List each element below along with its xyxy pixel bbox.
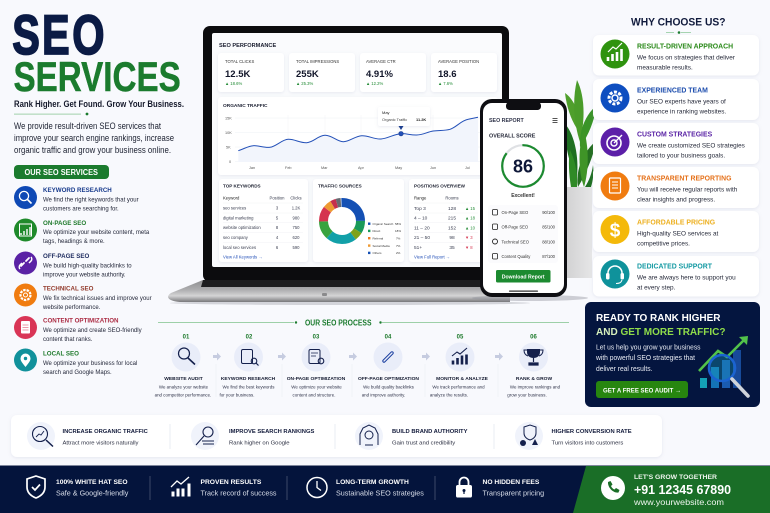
- reason: dedicated support: We are always here to support you: [637, 274, 736, 282]
- assurance: proven results: Track record of success: [200, 488, 277, 498]
- KPI: average CTR: ▲ 12.2%: [366, 81, 383, 86]
- step 1: website audit: [155, 334, 211, 398]
- reason: affordable pricing: High-quality SEO services at: [637, 230, 719, 238]
- service: technical SEO: [14, 284, 152, 311]
- service: content optimization: We optimize and create SEO-friendly: [43, 328, 142, 334]
- table: positions overview: 4 – 10: [414, 216, 428, 222]
- line chart: organic traffic: Jan: [249, 166, 255, 170]
- header block: [12, 4, 184, 155]
- step 5: monitor and analyze: MONITOR & ANALYZE: [436, 376, 489, 382]
- donut legend: 58%: [395, 222, 401, 226]
- CTA body: deliver real results.: [596, 364, 652, 373]
- KPI: total clicks: 12.5K: [225, 69, 250, 80]
- service: keyword research: customers are searching for.: [43, 206, 119, 212]
- why choose us heading: WHY CHOOSE US?: [631, 16, 726, 28]
- step 4: off-page optimization: 04: [385, 334, 392, 340]
- table: top keywords: local seo services: [223, 245, 256, 250]
- contact text: +91 12345 67890: [634, 483, 731, 497]
- laptop base shadow: [170, 301, 530, 305]
- service: off-page SEO: We build high-quality backlinks to: [43, 263, 132, 269]
- CTA headline: AND GET MORE TRAFFIC?: [596, 327, 726, 338]
- benefit: build brand authority: [355, 422, 468, 450]
- step 1: website audit: We analyze your website: [159, 385, 209, 390]
- intro paragraph: We provide result-driven SEO services that: [14, 121, 161, 131]
- KPI: total impressions: [289, 53, 355, 92]
- table: positions overview: 215: [448, 216, 456, 222]
- assurance: proven results: [171, 477, 277, 498]
- step 4: off-page optimization: [358, 334, 419, 398]
- step 3: on-page optimization: content and structure.: [293, 392, 335, 398]
- benefit: build brand authority: Gain trust and credibility: [392, 440, 455, 446]
- score breakdown: Technical SEO: [502, 239, 530, 244]
- donut legend: 18%: [395, 229, 401, 233]
- line chart: organic traffic: 0: [229, 160, 231, 164]
- panel: our SEO process: [155, 318, 569, 398]
- table: positions overview: 11 – 20: [414, 225, 430, 231]
- score breakdown: On-Page SEO: [502, 210, 529, 215]
- KPI: total clicks: [218, 53, 284, 92]
- service: technical SEO: website performance.: [42, 305, 101, 311]
- reason: dedicated support: at every step.: [637, 284, 676, 292]
- table: top keywords: Position: [270, 196, 285, 200]
- KPI: total clicks: TOTAL CLICKS: [225, 59, 254, 64]
- reason: custom strategies: [593, 123, 759, 164]
- assurance: long-term growth: [307, 478, 424, 498]
- services heading pill: OUR SEO SERVICES: [24, 168, 98, 177]
- intro paragraph: improve your search engine rankings, increase: [14, 133, 174, 143]
- donut legend: Organic Search: [372, 222, 394, 226]
- laptop screen: [212, 33, 502, 267]
- phone header: SEO REPORT: [489, 118, 524, 124]
- assurance: white hat SEO: [27, 476, 129, 498]
- score breakdown: [488, 205, 558, 263]
- step 6: rank and grow: grow your business.: [507, 392, 547, 398]
- table: positions overview: 51+: [414, 245, 422, 251]
- table: positions overview: ▼ 3: [465, 235, 473, 240]
- table: positions overview: 21 – 50: [414, 235, 430, 241]
- step 3: on-page optimization: [287, 334, 346, 398]
- CTA illustration: chart and magnifier: [699, 336, 748, 396]
- score breakdown: Content Quality: [502, 254, 531, 259]
- table: positions overview: ▲ 15: [465, 206, 476, 211]
- service: keyword research: We find the right keywords that your: [43, 197, 139, 203]
- score breakdown: 87/100: [542, 254, 556, 259]
- service: on-page SEO: tags, headings & more.: [43, 239, 105, 245]
- intro paragraph: organic traffic and grow your business online.: [14, 145, 171, 155]
- reason: affordable pricing: AFFORDABLE PRICING: [637, 220, 715, 226]
- service: content optimization: CONTENT OPTIMIZATION: [43, 318, 119, 324]
- table: top keywords: 4: [276, 235, 279, 240]
- chart tooltip: [378, 107, 430, 136]
- table: positions overview: Top 3: [414, 206, 426, 212]
- reason: affordable pricing: competitive prices.: [637, 240, 690, 248]
- score verdict: Excellent!: [511, 193, 535, 199]
- line chart: organic traffic: [218, 97, 498, 175]
- reason: experienced team: EXPERIENCED TEAM: [637, 88, 708, 94]
- step 4: off-page optimization: and improve authority.: [362, 392, 405, 398]
- step 6: rank and grow: 06: [530, 334, 537, 340]
- reason: experienced team: [593, 79, 759, 120]
- table: top keywords: 590: [292, 245, 300, 250]
- donut legend: 7%: [396, 244, 401, 248]
- CTA button: [596, 381, 688, 398]
- table: top keywords: 750: [292, 225, 300, 230]
- line chart: organic traffic: Jun: [430, 166, 436, 170]
- KPI: average position: 18.6: [438, 69, 456, 80]
- service: on-page SEO: [14, 218, 150, 245]
- CTA body: Let us help you grow your business: [596, 342, 701, 352]
- line chart: organic traffic: ORGANIC TRAFFIC: [223, 103, 268, 109]
- table: positions overview: ▼ 8: [465, 245, 473, 250]
- reason: transparent reporting: TRANSPARENT REPORTING: [637, 176, 731, 182]
- table: positions overview: 35: [449, 245, 455, 251]
- service: keyword research: [14, 186, 139, 212]
- line chart: organic traffic: Feb: [285, 166, 292, 170]
- service: off-page SEO: [14, 252, 132, 278]
- services heading pill: [14, 165, 109, 179]
- table: positions overview: ▲ 18: [465, 216, 476, 220]
- table: top keywords: Clicks: [290, 196, 302, 200]
- step 6: rank and grow: [507, 334, 561, 398]
- KPI: average CTR: 4.91%: [366, 69, 393, 80]
- contact text: [633, 474, 731, 507]
- plant: [563, 80, 597, 278]
- contact text: LET'S GROW TOGETHER: [634, 474, 717, 481]
- assurance: white hat SEO: 100% WHITE HAT SEO: [56, 479, 128, 486]
- service: technical SEO: We fix technical issues and improve your: [43, 296, 152, 302]
- reason: transparent reporting: clear insights and progress.: [637, 196, 715, 204]
- table: top keywords: 5: [276, 215, 279, 220]
- overall score label: OVERALL SCORE: [489, 134, 536, 140]
- reason: custom strategies: We create customized SEO strategies: [637, 142, 745, 150]
- panel: why choose us: [593, 16, 759, 296]
- KPI: average CTR: AVERAGE CTR: [366, 59, 396, 64]
- score breakdown: Off-Page SEO: [502, 225, 529, 230]
- step 2: keyword research: for your business.: [219, 392, 255, 398]
- step 1: website audit: and competitor performance.: [155, 392, 211, 398]
- phone body: [480, 99, 567, 297]
- table: top keywords: digital marketing: [223, 215, 254, 220]
- intro paragraph: [14, 121, 174, 155]
- KPI: average position: AVERAGE POSITION: [438, 59, 479, 64]
- KPI: average CTR: [360, 53, 426, 92]
- contact text: www.yourwebsite.com: [633, 498, 724, 507]
- KPI: average position: ▲ 7.6%: [438, 81, 453, 86]
- step 1: website audit: WEBSITE AUDIT: [164, 376, 203, 382]
- process heading: OUR SEO PROCESS: [305, 318, 372, 328]
- score breakdown: 88/100: [542, 239, 556, 244]
- step 5: monitor and analyze: 05: [457, 334, 464, 340]
- service: on-page SEO: We optimize your website content, meta: [43, 230, 150, 236]
- step 6: rank and grow: RANK & GROW: [516, 376, 552, 382]
- CTA headline: READY TO RANK HIGHER: [596, 313, 721, 324]
- table: top keywords: View All Keywords →: [223, 254, 262, 260]
- line chart: organic traffic: Apr: [358, 166, 365, 170]
- service: local SEO: LOCAL SEO: [43, 350, 79, 357]
- KPI: total impressions: 255K: [296, 69, 319, 80]
- reason: dedicated support: DEDICATED SUPPORT: [637, 264, 713, 270]
- service: local SEO: We optimize your business for local: [43, 361, 137, 367]
- service: off-page SEO: OFF-PAGE SEO: [43, 253, 89, 260]
- download button: Download Report: [502, 274, 545, 280]
- title: SERVICES: SERVICES: [14, 53, 181, 100]
- step 1: website audit: 01: [183, 334, 190, 340]
- donut legend: Referral: [372, 236, 384, 240]
- heading ornament: [666, 31, 691, 34]
- footer contact panel: [573, 466, 770, 513]
- donut legend: Direct: [372, 229, 381, 233]
- plant leaves: [565, 80, 597, 187]
- panel: our SEO services: [14, 165, 152, 376]
- assurance: white hat SEO: Safe & Google-friendly: [56, 488, 129, 498]
- table: positions overview: Range: [414, 196, 427, 200]
- line chart: organic traffic: Mar: [321, 166, 328, 170]
- tagline: Rank Higher. Get Found. Grow Your Business.: [14, 99, 184, 110]
- table: top keywords: TOP KEYWORDS: [223, 184, 261, 188]
- donut legend: [368, 222, 401, 255]
- donut chart: traffic sources: [313, 179, 404, 262]
- table: positions overview: View Full Report →: [414, 254, 450, 260]
- KPI: average position: [431, 53, 497, 92]
- table: top keywords: Keyword: [223, 196, 240, 200]
- dashboard title: SEO PERFORMANCE: [219, 43, 276, 49]
- icon: phone: [601, 476, 625, 500]
- step 4: off-page optimization: We build quality backlinks: [363, 385, 415, 390]
- table: positions overview: 152: [448, 225, 456, 231]
- table: top keywords: website optimization: [223, 225, 261, 230]
- line chart: organic traffic: 10K: [225, 131, 232, 135]
- CTA body: [595, 342, 701, 373]
- process arrows: [213, 352, 503, 360]
- assurance: long-term growth: LONG-TERM GROWTH: [336, 479, 409, 486]
- reason: experienced team: experience in ranking websites.: [637, 108, 726, 116]
- line chart: organic traffic: 5K: [226, 146, 231, 150]
- benefit: higher conversion rate: HIGHER CONVERSION RATE: [552, 429, 632, 435]
- title: SEO: SEO: [12, 4, 105, 67]
- panel: call to action: [585, 302, 760, 407]
- reason: experienced team: Our SEO experts have years of: [637, 98, 726, 106]
- KPI: total clicks: ▲ 18.6%: [225, 81, 242, 86]
- benefit: increase organic traffic: INCREASE ORGANIC TRAFFIC: [62, 429, 149, 435]
- table: top keywords: 8: [276, 225, 279, 230]
- line chart: organic traffic: 15K: [225, 116, 232, 120]
- table: top keywords: 980: [292, 215, 300, 220]
- service: technical SEO: TECHNICAL SEO: [43, 286, 94, 293]
- benefit: higher conversion rate: [515, 422, 632, 450]
- benefit: increase organic traffic: [27, 422, 149, 450]
- line chart: organic traffic: May: [395, 166, 402, 170]
- benefit: improve search rankings: [191, 422, 314, 450]
- table: top keywords: seo services: [223, 206, 246, 210]
- table: top keywords: seo company: [223, 235, 249, 240]
- reason: affordable pricing: $: [610, 220, 621, 242]
- step 5: monitor and analyze: [430, 334, 489, 398]
- reason: transparent reporting: [593, 167, 759, 208]
- service: content optimization: content that ranks.: [43, 337, 93, 343]
- laptop: [168, 26, 530, 305]
- reason: dedicated support: [593, 256, 759, 296]
- table: top keywords: 6: [276, 245, 279, 250]
- assurance: proven results: PROVEN RESULTS: [200, 479, 262, 486]
- table: top keywords: 620: [292, 235, 300, 240]
- service: off-page SEO: improve your website authority.: [43, 272, 126, 278]
- table: top keywords: [219, 179, 308, 262]
- donut chart: traffic sources: TRAFFIC SOURCES: [318, 184, 362, 188]
- benefit: improve search rankings: Rank higher on Google: [229, 440, 290, 446]
- reason: custom strategies: CUSTOM STRATEGIES: [637, 132, 713, 138]
- reason: custom strategies: tailored to your business goals.: [637, 152, 725, 160]
- table: positions overview: 128: [448, 206, 456, 212]
- chart tooltip: 11.2K: [416, 117, 426, 122]
- step 5: monitor and analyze: We track performance and: [432, 385, 485, 390]
- step 2: keyword research: [219, 334, 276, 398]
- benefit: build brand authority: BUILD BRAND AUTHORITY: [392, 429, 468, 435]
- KPI: total impressions: ▲ 25.3%: [296, 81, 313, 86]
- service: on-page SEO: ON-PAGE SEO: [43, 220, 86, 227]
- step 3: on-page optimization: We optimize your website: [291, 385, 342, 390]
- score breakdown: 90/100: [542, 210, 556, 215]
- table: positions overview: ▲ 10: [465, 225, 476, 230]
- service: content optimization: [14, 316, 142, 343]
- step 2: keyword research: KEYWORD RESEARCH: [221, 376, 276, 382]
- step 4: off-page optimization: OFF-PAGE OPTIMIZATION: [358, 376, 419, 382]
- table: top keywords: 3: [276, 206, 279, 210]
- score gauge: [502, 145, 544, 187]
- phone: [472, 99, 588, 301]
- table: top keywords: 1.2K: [292, 206, 301, 210]
- service: local SEO: search and Google Maps.: [43, 370, 112, 376]
- donut legend: Others: [372, 251, 382, 255]
- benefit: higher conversion rate: Turn visitors into customers: [552, 440, 623, 446]
- reason: transparent reporting: You will receive regular reports with: [637, 186, 738, 194]
- chart tooltip: Organic Traffic: [382, 117, 407, 122]
- reason: result-driven approach: measurable results.: [637, 64, 693, 72]
- score gauge: 86: [513, 156, 533, 176]
- download button: [496, 270, 550, 282]
- CTA headline: [596, 313, 726, 338]
- step 6: rank and grow: We improve rankings and: [510, 385, 561, 390]
- service: keyword research: KEYWORD RESEARCH: [43, 187, 112, 194]
- benefit: improve search rankings: IMPROVE SEARCH RANKINGS: [229, 429, 314, 435]
- footer band: [0, 466, 770, 513]
- step 3: on-page optimization: 03: [313, 334, 320, 340]
- table: positions overview: POSITIONS OVERVIEW: [414, 184, 466, 188]
- donut legend: Social Media: [372, 244, 390, 248]
- step 2: keyword research: 02: [246, 334, 253, 340]
- step 5: monitor and analyze: analyze the results.: [430, 392, 468, 398]
- step 2: keyword research: We find the best keywords: [223, 385, 275, 390]
- laptop lid: [203, 26, 509, 282]
- assurance: long-term growth: Sustainable SEO strategies: [336, 488, 424, 498]
- reason: result-driven approach: We focus on strategies that deliver: [637, 54, 736, 62]
- service: local SEO: [14, 348, 137, 376]
- reason: result-driven approach: RESULT-DRIVEN APPROACH: [637, 44, 733, 50]
- donut legend: 2%: [396, 251, 401, 255]
- benefit: increase organic traffic: Attract more visitors naturally: [62, 440, 139, 446]
- score breakdown: 85/100: [542, 225, 556, 230]
- KPI: total impressions: TOTAL IMPRESSIONS: [296, 59, 339, 64]
- laptop base: [168, 280, 510, 302]
- line chart: organic traffic: Jul: [465, 166, 470, 170]
- table: positions overview: [409, 179, 498, 262]
- assurance: no hidden fees: [456, 478, 544, 498]
- phone screen: [483, 102, 564, 293]
- tagline divider: [14, 113, 88, 115]
- donut legend: 7%: [396, 236, 401, 240]
- CTA body: with powerful SEO strategies that: [595, 353, 696, 362]
- chart tooltip: May: [382, 110, 390, 115]
- assurance: no hidden fees: Transparent pricing: [482, 488, 544, 498]
- reason: result-driven approach: [593, 35, 759, 76]
- panel: benefits strip: [11, 415, 662, 457]
- CTA button: GET A FREE SEO AUDIT →: [603, 388, 681, 394]
- table: positions overview: Rooms: [445, 196, 459, 200]
- assurance: no hidden fees: NO HIDDEN FEES: [482, 479, 540, 486]
- reason: affordable pricing: [593, 211, 759, 252]
- plant pot: [563, 187, 592, 278]
- table: positions overview: 98: [449, 235, 455, 241]
- step 3: on-page optimization: ON-PAGE OPTIMIZATION: [287, 376, 346, 382]
